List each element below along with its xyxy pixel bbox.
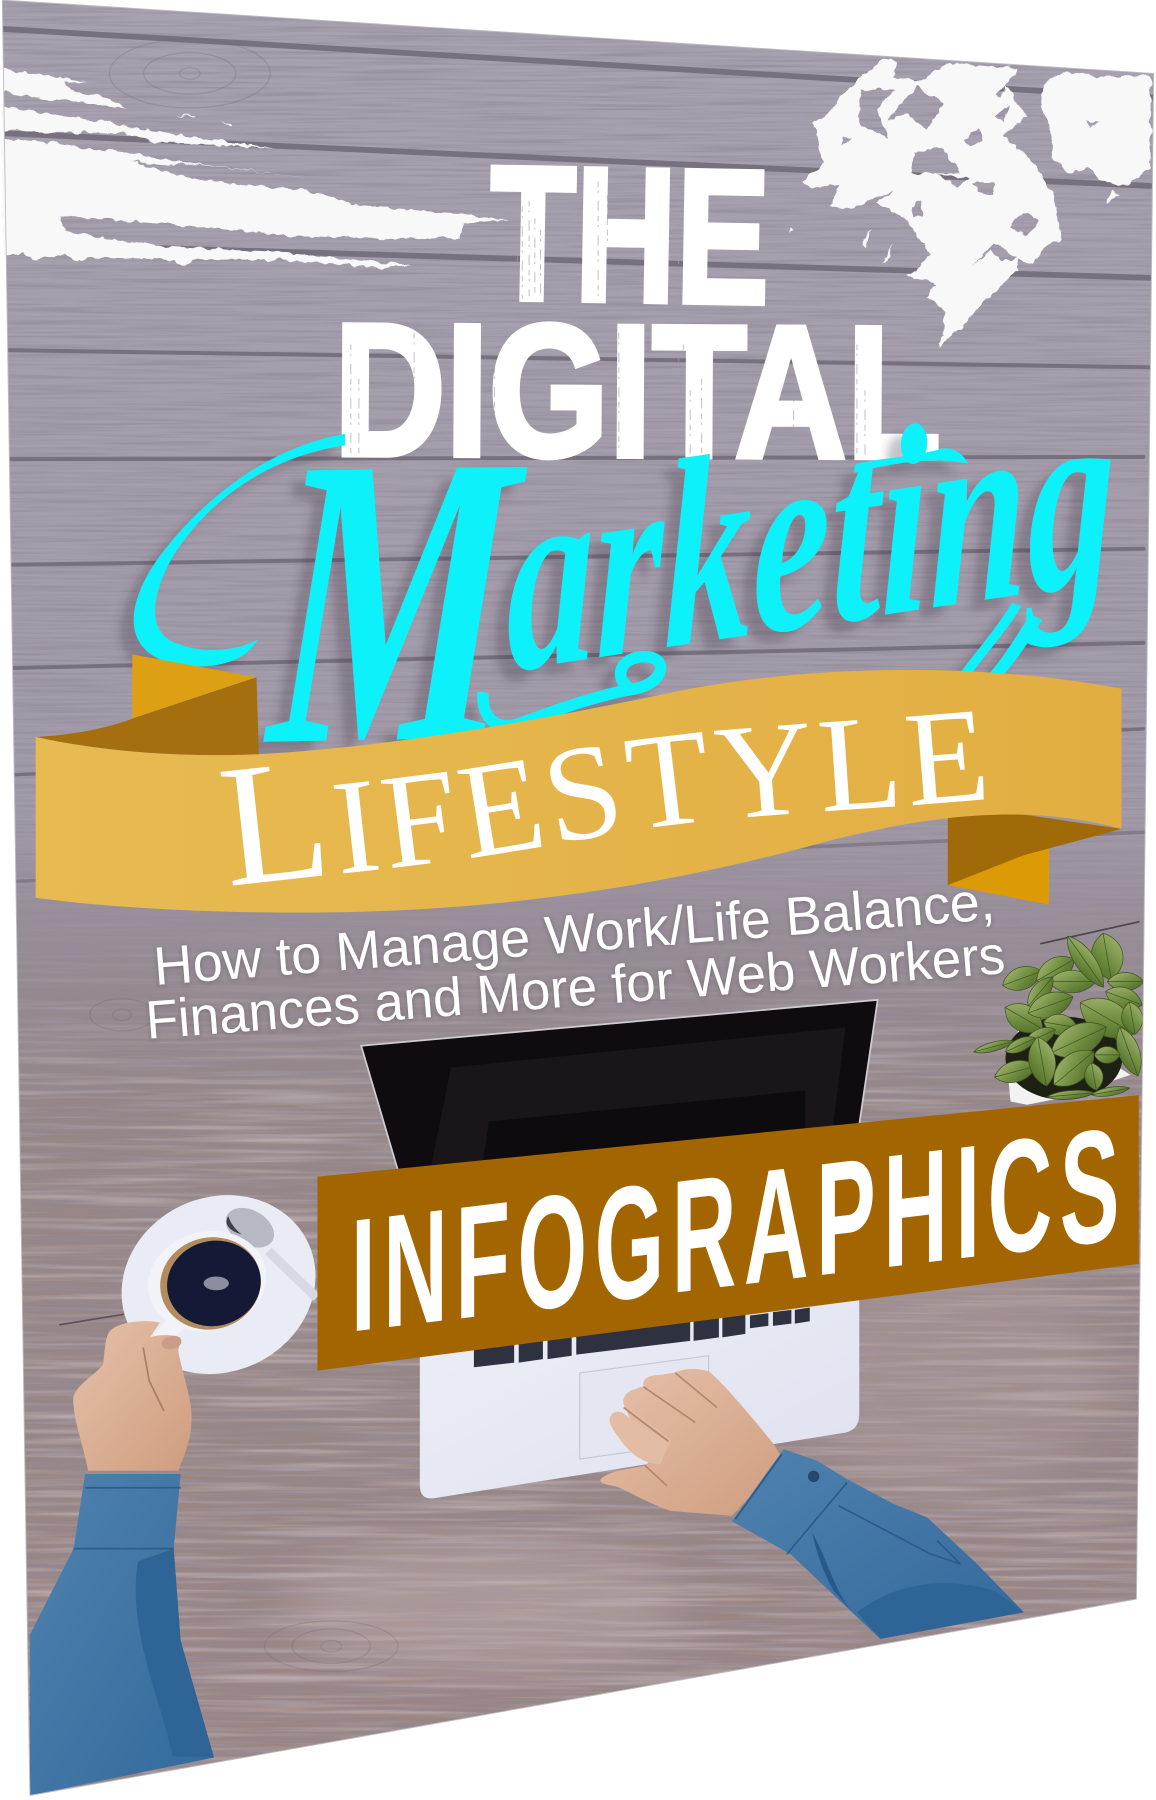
laptop base [420, 1274, 859, 1498]
title: Marketing script [134, 249, 1118, 865]
INFOGRAPHICS text: INFOGRAPHICS [351, 1093, 1127, 1366]
title: THE: THE [488, 127, 771, 344]
left swash of the M [134, 434, 345, 666]
ribbon banner [36, 654, 1122, 913]
tail loop [483, 657, 661, 726]
spoon [219, 1200, 317, 1298]
right hand [600, 1369, 1024, 1639]
left sleeve [30, 1474, 214, 1795]
right sleeve [732, 1449, 1024, 1639]
white paint splatter, top right [790, 58, 1151, 348]
cup [136, 1218, 278, 1344]
left hand [30, 1320, 214, 1795]
ribbon right fold [948, 804, 1121, 885]
subtitle [144, 871, 1007, 1051]
pot [1006, 1030, 1131, 1105]
banner shape [317, 1095, 1139, 1371]
wood knots [90, 39, 398, 1671]
Marketing word: M [254, 336, 537, 865]
g descender [949, 603, 1042, 708]
reflected keyboard [483, 1091, 805, 1162]
plant [973, 930, 1148, 1105]
laptop [361, 1000, 878, 1498]
ribbon left fold [36, 677, 259, 755]
t crossbar [853, 448, 969, 473]
keyboard row [474, 1308, 810, 1367]
subtitle line 2: Finances and More for Web Workers [144, 925, 1007, 1051]
coffee [157, 1230, 271, 1337]
ribbon main band [36, 670, 1121, 913]
title: DIGITAL: DIGITAL [333, 284, 942, 498]
Marketing word: arketing [505, 342, 1117, 730]
LIFESTYLE text: LIFESTYLE [220, 712, 984, 886]
ribbon left tail [132, 654, 257, 719]
ribbon right tail [948, 844, 1049, 905]
index finger [609, 1412, 669, 1464]
screen reflection [428, 1027, 845, 1182]
cup handle [150, 1320, 184, 1345]
trackpad [580, 1356, 709, 1459]
subtitle line 1: How to Manage Work/Life Balance, [152, 871, 997, 997]
laptop screen [361, 1000, 878, 1194]
saucer [92, 1164, 345, 1405]
coffee cup on saucer [92, 1164, 345, 1405]
white paint strokes, left [2, 68, 509, 268]
INFOGRAPHICS banner [317, 1093, 1139, 1371]
finger gap filler [624, 1404, 672, 1464]
title distress marks [351, 181, 865, 457]
